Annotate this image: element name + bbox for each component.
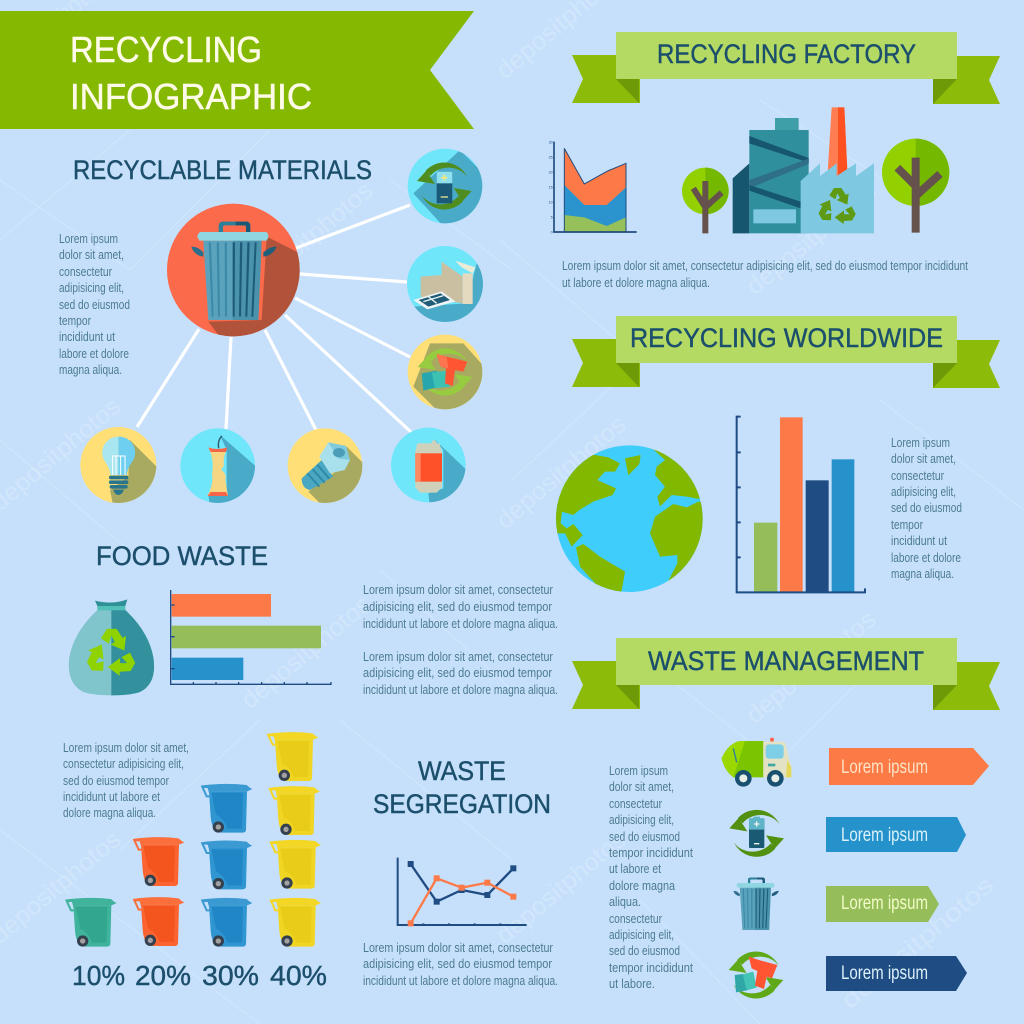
- text block: waste management: dolor sit amet,: [609, 780, 674, 794]
- text block: recyclable materials: adipisicing elit,: [59, 281, 124, 295]
- icon: garbage truck: [722, 738, 791, 787]
- icon: textile recycling small: [729, 952, 783, 998]
- text block: bins: sed do eiusmod tempor: [63, 774, 169, 788]
- text block: segregation: incididunt ut labore et dolore magna aliqua.: [363, 974, 558, 988]
- icon: trash can small: [733, 878, 779, 930]
- text block: waste management: consectetur: [609, 797, 662, 811]
- heading: waste segregation: WASTE: [418, 756, 506, 786]
- text block: food waste 2: incididunt ut labore et dolore magna aliqua.: [363, 683, 558, 697]
- text block: waste management: [609, 764, 693, 991]
- text block: recyclable materials: labore et dolore: [59, 347, 129, 361]
- text block: waste management: ut labore et: [609, 862, 661, 876]
- arrow label: orange: [829, 748, 989, 785]
- area chart: 0: [551, 231, 553, 235]
- watermark: depositphotos: [836, 871, 999, 1015]
- text block: bins: dolore magna aliqua.: [63, 806, 156, 820]
- ribbon: recycling worldwide: RECYCLING WORLDWIDE: [630, 323, 943, 353]
- watermark: depositphotos: [741, 605, 881, 730]
- watermark: depositphotos: [236, 590, 376, 715]
- text block: worldwide: consectetur: [891, 469, 944, 483]
- arrow label: navy: [826, 956, 967, 991]
- text block: food waste 1: Lorem ipsum dolor sit amet, consectetur: [363, 583, 553, 597]
- arrow label: blue: Lorem ipsum: [841, 825, 928, 846]
- heading: recyclable materials: RECYCLABLE MATERIALS: [73, 155, 372, 185]
- bar chart: worldwide: [737, 417, 865, 592]
- arrow label: navy: Lorem ipsum: [841, 963, 928, 984]
- icon: battery recycling: [408, 148, 482, 224]
- text block: worldwide: incididunt ut: [891, 534, 947, 548]
- text block: waste management: tempor incididunt: [609, 846, 693, 860]
- ribbon: waste management: WASTE MANAGEMENT: [648, 646, 924, 676]
- percent labels: [72, 960, 327, 991]
- text block: bins: Lorem ipsum dolor sit amet,: [63, 741, 189, 755]
- globe: [556, 445, 703, 592]
- area chart: 10: [549, 201, 553, 205]
- watermark: depositphotos: [741, 176, 881, 301]
- text block: food waste 1: [363, 583, 558, 631]
- percent labels: 40%: [270, 960, 327, 991]
- text block: bins: [63, 741, 189, 820]
- title banner: INFOGRAPHIC: [70, 76, 312, 117]
- icon: textile recycling: [408, 334, 482, 410]
- area chart: 15: [549, 186, 553, 190]
- text block: waste management: aliqua.: [609, 895, 641, 909]
- text block: food waste 1: incididunt ut labore et dolore magna aliqua.: [363, 617, 558, 631]
- icon: cardboard and paper: [407, 246, 483, 322]
- text block: worldwide: tempor: [891, 518, 923, 532]
- text block: waste management: adipisicing elit,: [609, 813, 674, 827]
- text block: segregation: adipisicing elit, sed do eiusmod tempor: [363, 957, 552, 971]
- text block: waste management: Lorem ipsum: [609, 764, 668, 778]
- text block: worldwide: dolor sit amet,: [891, 452, 956, 466]
- text block: waste management: tempor incididunt: [609, 961, 693, 975]
- pictogram: bin stacks: [65, 732, 321, 947]
- percent labels: 20%: [135, 960, 191, 991]
- text block: recyclable materials: Lorem ipsum: [59, 232, 118, 246]
- text block: bins: incididunt ut labore et: [63, 790, 160, 804]
- connector lines: [137, 205, 411, 432]
- text block: recyclable materials: dolor sit amet,: [59, 248, 124, 262]
- heading: waste segregation: SEGREGATION: [373, 789, 551, 819]
- arrow label: green: [826, 886, 939, 922]
- illustration: factory with trees: [682, 107, 949, 233]
- text block: food waste 2: [363, 650, 558, 697]
- ribbon: recycling worldwide: [572, 316, 1000, 388]
- text block: factory: [562, 259, 968, 290]
- arrow label: blue: [826, 817, 966, 852]
- icon: recycling bag: [69, 599, 154, 695]
- watermark: depositphotos: [238, 176, 378, 301]
- icon: apple core: [180, 428, 260, 507]
- percent labels: 10%: [72, 960, 125, 991]
- text block: worldwide: sed do eiusmod: [891, 501, 962, 515]
- text block: segregation: Lorem ipsum dolor sit amet, consectetur: [363, 941, 553, 955]
- percent labels: 30%: [202, 960, 259, 991]
- text block: worldwide: [891, 436, 962, 581]
- text block: worldwide: adipisicing elit,: [891, 485, 956, 499]
- title banner: RECYCLING: [70, 29, 262, 70]
- text block: recyclable materials: incididunt ut: [59, 330, 115, 344]
- text block: factory: ut labore et dolore magna aliqua.: [562, 276, 710, 290]
- text block: bins: consectetur adipisicing elit,: [63, 757, 184, 771]
- text block: recyclable materials: [59, 232, 130, 377]
- watermark: depositphotos: [491, 825, 631, 950]
- title banner: [0, 11, 474, 129]
- ribbon: recycling factory: RECYCLING FACTORY: [657, 39, 916, 69]
- text block: waste management: sed do eiusmod: [609, 944, 680, 958]
- text block: waste management: ut labore.: [609, 977, 655, 991]
- text block: food waste 1: adipisicing elit, sed do eiusmod tempor: [363, 600, 552, 614]
- text block: worldwide: magna aliqua.: [891, 567, 954, 581]
- area chart: 30: [549, 141, 553, 145]
- icon: drink can: [391, 428, 467, 507]
- text block: recyclable materials: sed do eiusmod: [59, 298, 130, 312]
- area chart: 25: [549, 156, 553, 160]
- heading: waste segregation: [373, 756, 551, 819]
- text block: recyclable materials: tempor: [59, 314, 91, 328]
- ribbon: recycling factory: [572, 32, 1000, 104]
- text block: food waste 2: Lorem ipsum dolor sit amet, consectetur: [363, 650, 553, 664]
- ribbon: waste management: [572, 638, 1000, 710]
- icon: metal bolt: [288, 428, 367, 507]
- area chart: 20: [549, 171, 553, 175]
- icon: light bulb: [80, 427, 156, 503]
- text block: waste management: consectetur: [609, 912, 662, 926]
- arrow label: orange: Lorem ipsum: [841, 757, 928, 778]
- text block: recyclable materials: magna aliqua.: [59, 363, 122, 377]
- text block: segregation: [363, 941, 558, 988]
- text block: worldwide: Lorem ipsum: [891, 436, 950, 450]
- area chart: 5: [551, 216, 553, 220]
- text block: worldwide: labore et dolore: [891, 551, 961, 565]
- icon: battery recycling small: [729, 810, 784, 857]
- text block: waste management: sed do eiusmod: [609, 830, 680, 844]
- text block: waste management: adipisicing elit,: [609, 928, 674, 942]
- arrow label: green: Lorem ipsum: [841, 893, 928, 914]
- text block: food waste 2: adipisicing elit, sed do eiusmod tempor: [363, 666, 552, 680]
- line chart: [398, 858, 527, 926]
- area chart: [549, 141, 637, 235]
- bar chart: food waste: [171, 590, 331, 684]
- icon: main trash can circle: [167, 204, 300, 336]
- watermark: depositphotos: [491, 410, 631, 535]
- heading: food waste: FOOD WASTE: [96, 541, 268, 571]
- text block: waste management: dolore magna: [609, 879, 675, 893]
- text block: recyclable materials: consectetur: [59, 265, 112, 279]
